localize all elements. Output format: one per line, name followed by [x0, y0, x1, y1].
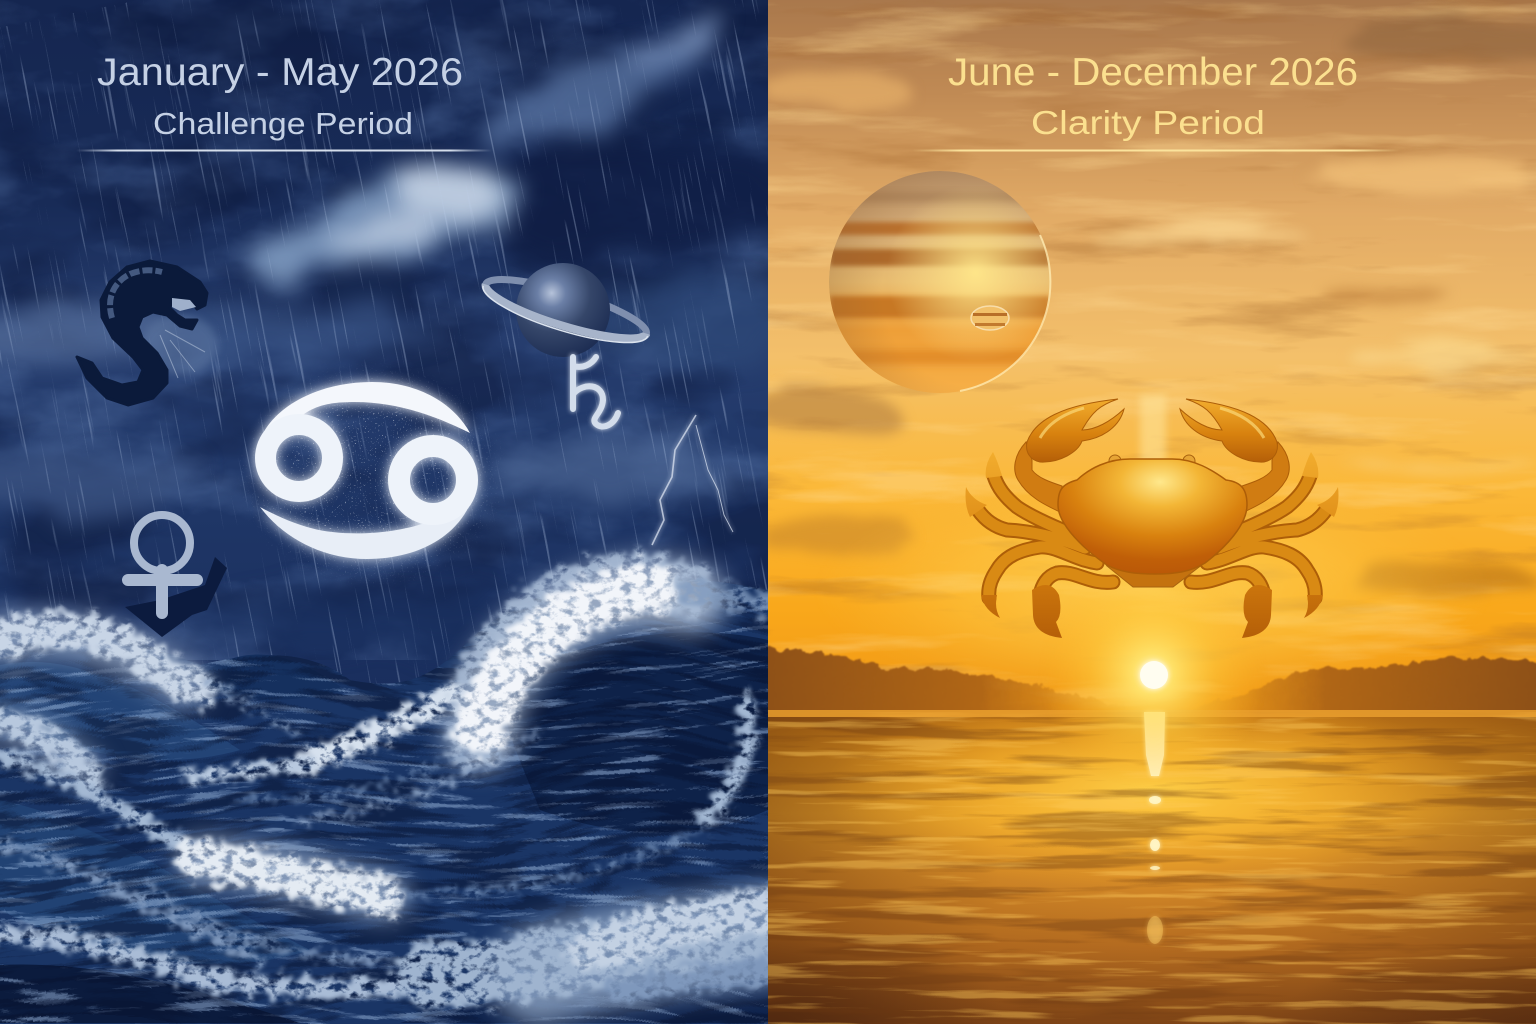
wave streak texture: [0, 578, 768, 1024]
icon: hydra serpent: [77, 261, 218, 405]
crab right half: [1180, 399, 1338, 638]
rain: [0, 0, 768, 684]
crab lower plate: [1107, 564, 1203, 587]
icon: cancer symbol: [258, 382, 477, 559]
heading: clarity period: June - December 2026: [948, 51, 1358, 94]
icon: golden crab: [966, 399, 1338, 638]
heading: challenge period: Challenge Period: [153, 106, 413, 141]
treeline: [740, 650, 1536, 716]
storm clouds: [0, 0, 810, 660]
heading: challenge period: [76, 51, 492, 152]
water ripples: [768, 712, 1536, 1024]
heading: clarity period: Clarity Period: [1031, 104, 1265, 141]
sun reflection: [1144, 712, 1165, 944]
ocean waves: [0, 578, 768, 1024]
icon: saturn with glyph: [477, 263, 651, 427]
lightning: [652, 415, 733, 545]
panel: challenge period storm: [0, 0, 768, 1024]
lake: [768, 690, 1536, 1024]
crab left half: [966, 399, 1124, 638]
icon: venus symbol with dark wing: [125, 515, 227, 637]
heading: clarity period: [912, 51, 1400, 152]
sunset clouds: [755, 0, 1536, 710]
soft foam glow: [0, 592, 768, 975]
heading: challenge period: January - May 2026: [97, 51, 463, 94]
light beam: [1140, 395, 1166, 475]
panel: clarity period sunset: [740, 0, 1536, 1024]
central light glow: [878, 512, 1442, 676]
sun: [1038, 559, 1268, 789]
cancer sparkle dust: [242, 366, 501, 584]
wave foam: [0, 579, 768, 990]
icon: jupiter: [829, 171, 1051, 393]
crab shell: [1058, 459, 1247, 574]
